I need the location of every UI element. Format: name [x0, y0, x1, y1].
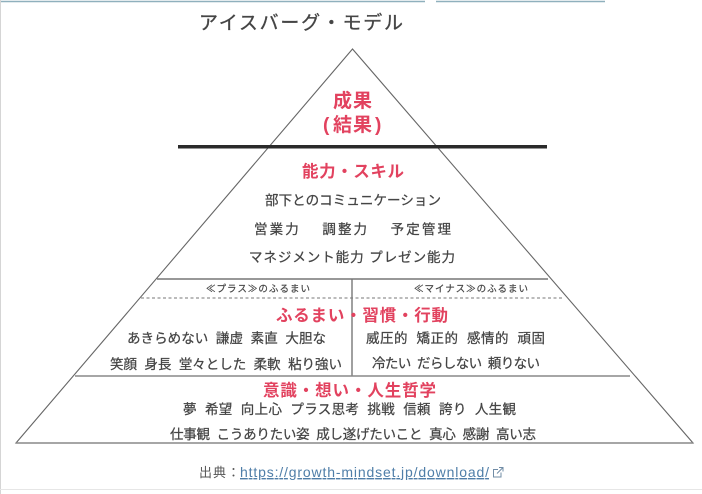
tier: mindset and philosophy: 意識・想い・人生哲学	[263, 380, 436, 400]
icon: external link	[494, 468, 503, 477]
tier: abilities and skills: 能力・スキル	[302, 161, 404, 181]
tier: abilities and skills	[249, 161, 455, 265]
thick divider line	[178, 145, 547, 148]
pyramid outline	[16, 49, 693, 443]
tier: behaviors and habits: あきらめない 謙虚 素直 大胆な	[127, 331, 326, 346]
tier: results	[323, 89, 381, 136]
tier: mindset and philosophy: 仕事観 こうありたい姿 成し遂げたいこと 真心 感謝 高い志	[170, 426, 536, 442]
label: plus behaviors: ≪プラス≫のふるまい	[206, 284, 310, 295]
tier: results: 成果	[333, 89, 372, 112]
tier: abilities and skills: 営業力 調整力 予定管理	[254, 222, 452, 237]
title: アイスバーグ・モデル	[199, 12, 403, 34]
tier: results: 結果	[333, 114, 372, 136]
tier: results: (	[323, 115, 330, 136]
tier: mindset and philosophy	[170, 380, 536, 442]
source credit: https://growth-mindset.jp/download/	[240, 464, 489, 480]
tier: behaviors and habits: 笑顔 身長 堂々とした 柔軟 粘り強い	[110, 357, 342, 372]
tier: abilities and skills: マネジメント能力 プレゼン能力	[249, 250, 455, 265]
tier: behaviors and habits: 冷たい だらしない 頼りない	[372, 356, 540, 371]
tier: behaviors and habits: 威圧的 矯正的 感情的 頑固	[366, 330, 545, 346]
source credit: 出典：	[199, 465, 240, 480]
label: minus behaviors: ≪マイナス≫のふるまい	[414, 284, 528, 295]
tier: results: )	[375, 115, 381, 136]
tier: mindset and philosophy: 夢 希望 向上心 プラス思考 挑戦 信頼 誇り 人生観	[183, 402, 516, 417]
tier: behaviors and habits	[110, 306, 545, 372]
tier: abilities and skills: 部下とのコミュニケーション	[265, 193, 441, 208]
tier: behaviors and habits: ふるまい・習慣・行動	[276, 306, 448, 325]
